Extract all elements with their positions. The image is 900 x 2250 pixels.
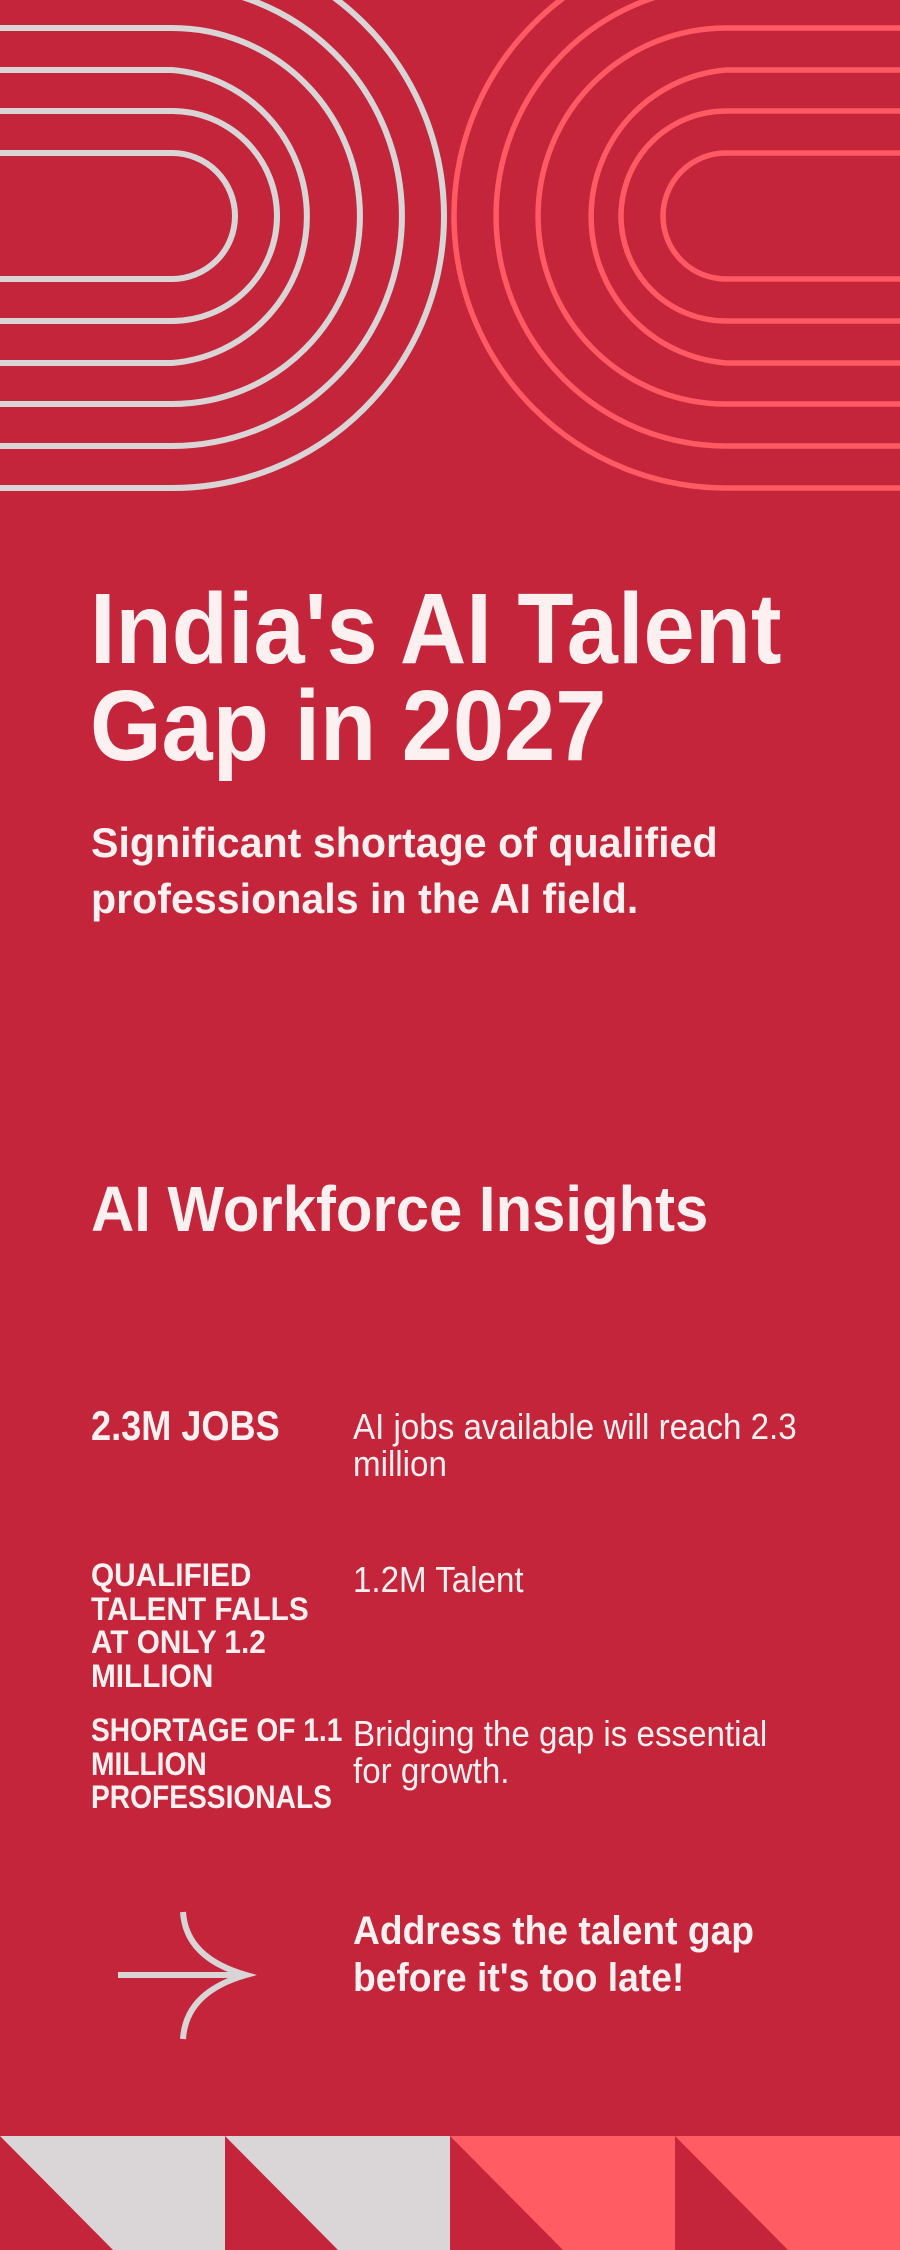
decorative bottom triangles [0,2136,900,2250]
call to action: Address the talent gap [353,1909,754,1953]
title: India's AI Talent [90,573,782,685]
icon: arrow [118,1912,257,2040]
title: Gap in 2027 [90,670,606,782]
stat row: shortage [91,1712,767,1815]
stat label: qualified talent: TALENT FALLS [91,1590,309,1626]
stat label: shortage: SHORTAGE OF 1.1 [91,1712,342,1748]
subtitle [91,819,718,922]
stat label: qualified talent [91,1557,309,1694]
title [90,573,782,782]
stat label: 2.3M jobs: 2.3M JOBS [91,1402,280,1449]
stat label: shortage [91,1712,342,1815]
stat description: bridging: for growth. [353,1750,509,1791]
stat description: jobs [353,1406,797,1484]
subtitle: Significant shortage of qualified [91,819,718,866]
stat label: qualified talent: MILLION [91,1658,213,1694]
stat description: bridging: Bridging the gap is essential [353,1713,767,1754]
stat description: bridging [353,1713,767,1791]
stat description: jobs: AI jobs available will reach 2.3 [353,1406,797,1447]
decorative header arcs [0,0,900,491]
call to action: before it's too late! [353,1956,684,2000]
stat row: qualified talent [91,1557,524,1694]
subtitle: professionals in the AI field. [91,875,638,922]
section heading: AI Workforce Insights [91,1173,708,1245]
stat label: qualified talent: AT ONLY 1.2 [91,1624,266,1660]
stat label: shortage: PROFESSIONALS [91,1779,332,1815]
stat description: talent: 1.2M Talent [353,1559,524,1600]
left arcs group [0,0,444,488]
right arcs group [454,0,900,488]
call to action [353,1909,754,2000]
stat label: shortage: MILLION [91,1746,207,1782]
stat row: jobs [91,1402,797,1484]
stat description: jobs: million [353,1443,447,1484]
stat label: qualified talent: QUALIFIED [91,1557,251,1593]
